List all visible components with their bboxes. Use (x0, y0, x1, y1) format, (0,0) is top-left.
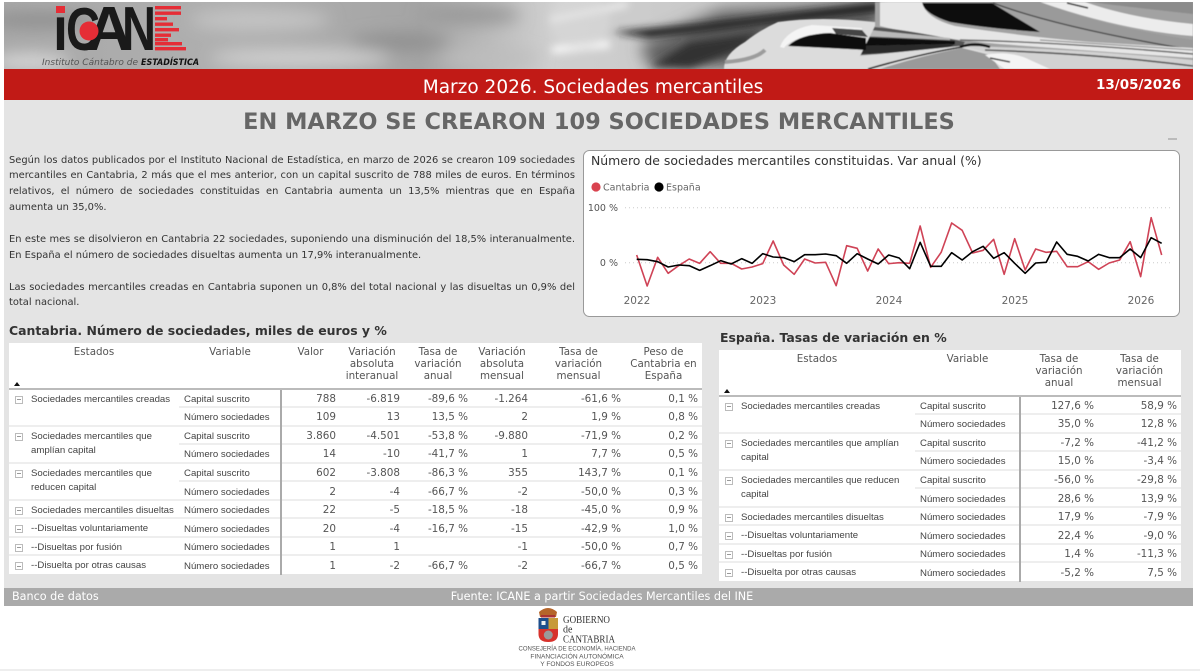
table: España: capital (741, 452, 769, 463)
table: Cantabria: reducen capital (31, 482, 96, 493)
table: Cantabria: Valor (298, 346, 323, 358)
table: Cantabria: Número sociedades (184, 561, 270, 572)
table: Cantabria: -89,6 % (428, 393, 468, 405)
table: Cantabria: mensual (557, 370, 600, 382)
text block: summary: relativos, el número de sociedades constituidas en Cantabria aumenta un 13,5% mientras que en España (9, 186, 575, 197)
table: España: Variable (947, 353, 988, 365)
table: Cantabria: 0,9 % (668, 504, 698, 516)
legend: Cantabria (603, 182, 649, 194)
table: Cantabria: Capital suscrito (184, 431, 250, 442)
table: Cantabria: -1.264 (494, 393, 528, 405)
table: Cantabria: -1 (518, 541, 528, 553)
table: España: 15,0 % (1058, 455, 1094, 467)
table: España: Sociedades mercantiles que reducen (741, 475, 899, 486)
panel: line chart card (583, 150, 1180, 317)
table: España: --Disueltas por fusión (741, 549, 832, 560)
middle dark layers (860, 26, 965, 55)
table: Cantabria: 13 (387, 411, 400, 423)
chart title: Número de sociedades mercantiles constituidas. Var anual (%) (591, 153, 982, 168)
source: Fuente: ICANE a partir Sociedades Mercantiles del INE (451, 590, 753, 603)
table: España: anual (1045, 377, 1073, 389)
table: Cantabria: mensual (480, 370, 524, 382)
table: Cantabria: 20 (323, 523, 336, 535)
table: Cantabria: Número sociedades (184, 486, 270, 498)
front fold (724, 19, 1050, 69)
table: España: -7,2 % (1061, 437, 1094, 449)
table: España: Número sociedades (920, 419, 1006, 430)
table: Cantabria: Número sociedades (184, 505, 270, 516)
table: Cantabria: Número sociedades (184, 449, 270, 460)
table: Cantabria: -2 (518, 486, 528, 498)
table: España: Sociedades mercantiles disueltas (741, 512, 884, 523)
table: España: variación (1035, 365, 1083, 377)
table: Cantabria: --Disueltas voluntariamente (31, 523, 148, 534)
table: Cantabria: 2 (329, 486, 336, 498)
table: España: 13,9 % (1141, 492, 1177, 504)
text block: summary: aumenta un 35,0%. (9, 202, 106, 213)
table: España: capital (741, 489, 769, 500)
table: España: -29,8 % (1137, 474, 1177, 486)
table: España: Capital suscrito (920, 401, 986, 412)
y axis labels: 0 % (600, 258, 618, 269)
table: España: mensual (1118, 377, 1161, 389)
table: Cantabria: 0,5 % (668, 560, 698, 572)
x axis labels: 2026 (1128, 295, 1155, 307)
table: Cantabria: Cantabria en (630, 358, 697, 370)
page background panel (4, 100, 1193, 588)
table: España: Sociedades mercantiles que amplían (741, 438, 899, 449)
logo: ICANE: I (54, 7, 68, 60)
table: Cantabria: -3.808 (366, 467, 400, 479)
table: Cantabria: -2 (518, 560, 528, 572)
table: Cantabria: --Disueltas por fusión (31, 542, 122, 553)
text block: summary: En este mes se disolvieron en Cantabria 22 sociedades, suponiendo una disminución del 18,5% interanualmente. (9, 234, 575, 245)
text block: summary (9, 155, 575, 308)
table: Cantabria: interanual (346, 370, 398, 382)
table: Cantabria: Número sociedades (184, 542, 270, 553)
logo: ICANE (42, 2, 199, 68)
table: Cantabria: 1 (521, 448, 528, 460)
table: España: 7,5 % (1147, 567, 1177, 579)
table: Cantabria: -4.501 (366, 430, 400, 442)
logo: Gobierno de Cantabria: CANTABRIA (563, 634, 616, 646)
x axis labels (624, 295, 1155, 307)
text block: summary: Las sociedades mercantiles creadas en Cantabria suponen un 0,8% del total nacional y las disueltas un 0,9% del (9, 282, 575, 293)
table: España: Tasa de (1120, 353, 1159, 365)
table: Cantabria: 0,2 % (668, 430, 698, 442)
table: Cantabria: 0,1 % (668, 467, 698, 479)
table: España: --Disueltas voluntariamente (741, 530, 858, 541)
table: España: 35,0 % (1058, 418, 1094, 430)
table: Cantabria (9, 343, 702, 574)
x axis labels: 2023 (750, 295, 776, 307)
table: España: Tasa de (1040, 353, 1078, 365)
table: Cantabria: 0,5 % (668, 448, 698, 460)
table: España: variación (1116, 365, 1163, 377)
table: Cantabria: Sociedades mercantiles que (31, 431, 152, 442)
table: Cantabria: 7,7 % (591, 448, 621, 460)
table: Cantabria: -4 (390, 486, 400, 498)
x axis labels: 2025 (1002, 295, 1028, 307)
footer bar (4, 588, 1193, 606)
table: España: Estados (797, 353, 837, 365)
table: Cantabria: 13,5 % (432, 411, 468, 423)
x axis labels: 2024 (876, 295, 903, 307)
legend: España (666, 182, 701, 194)
table: Cantabria: Variable (209, 346, 251, 358)
table: España: Número sociedades (920, 549, 1006, 560)
table: Cantabria: 602 (316, 467, 336, 479)
table: España: Capital suscrito (920, 475, 986, 486)
table: Cantabria: Número sociedades (184, 524, 270, 535)
table: Cantabria: absoluta (480, 358, 524, 370)
band title: Marzo 2026. Sociedades mercantiles (423, 77, 763, 98)
table: Cantabria: 3.860 (306, 430, 336, 442)
table: España: 12,8 % (1141, 418, 1177, 430)
table: Cantabria: -4 (390, 523, 400, 535)
table: España: Número sociedades (920, 494, 1006, 504)
table: Cantabria: absoluta (350, 358, 394, 370)
heading: Cantabria table: Cantabria. Número de sociedades, miles de euros y % (9, 323, 387, 338)
table: Cantabria: -53,8 % (428, 430, 468, 442)
table: Cantabria: 355 (508, 467, 528, 479)
table: Cantabria: -10 (383, 448, 400, 460)
icon: coat of arms (538, 608, 558, 642)
table: Cantabria: -66,7 % (428, 560, 468, 572)
table: España: Número sociedades (920, 531, 1006, 542)
table: Cantabria: Sociedades mercantiles que (31, 468, 152, 479)
table: España: -3,4 % (1144, 455, 1177, 467)
table: Cantabria: Número sociedades (184, 412, 270, 423)
table: Cantabria: -86,3 % (428, 467, 468, 479)
x axis labels: 2022 (624, 295, 650, 307)
table: Cantabria: Peso de (644, 346, 684, 358)
table: Cantabria: anual (424, 370, 452, 382)
table: Cantabria: 109 (316, 411, 336, 423)
table: Cantabria: 788 (316, 393, 336, 405)
table: España (719, 350, 1181, 581)
table: Cantabria: 0,1 % (668, 393, 698, 405)
logo: ICANE: ESTADÍSTICA (141, 56, 199, 68)
table: España: -9,0 % (1144, 530, 1177, 542)
text block: summary: mercantiles en Cantabria, 2 más que el mes anterior, con un capital suscrito de 788 miles de euros. En términos (9, 170, 575, 181)
table: Cantabria: 0,7 % (668, 541, 698, 553)
table: Cantabria: -6.819 (366, 393, 400, 405)
table: España: -11,3 % (1137, 548, 1177, 560)
table: Cantabria: -2 (390, 560, 400, 572)
table: Cantabria: -16,7 % (428, 523, 468, 535)
table: Cantabria: 1,0 % (668, 523, 698, 535)
table: España: 28,6 % (1058, 492, 1094, 504)
table: Cantabria: 2 (521, 411, 528, 423)
logo: Gobierno de Cantabria: de (563, 624, 573, 636)
table: España: -5,2 % (1061, 567, 1094, 579)
table: España: 58,9 % (1141, 400, 1177, 412)
right stack of pages (875, 2, 1193, 69)
table: Cantabria: -45,0 % (581, 504, 621, 516)
table: Cantabria: -41,7 % (428, 448, 468, 460)
date: 13/05/2026 (1096, 77, 1181, 93)
table: Cantabria: -50,0 % (581, 486, 621, 498)
table: Cantabria: -18 (511, 504, 528, 516)
table: Cantabria: Capital suscrito (184, 468, 250, 479)
table: Cantabria: -71,9 % (581, 430, 621, 442)
table: Cantabria: --Disuelta por otras causas (31, 560, 146, 571)
table: Cantabria: amplían capital (31, 445, 96, 456)
table: Cantabria: -9.880 (494, 430, 528, 442)
legend (591, 182, 701, 194)
y axis labels (588, 203, 618, 269)
table: Cantabria: Variación (348, 346, 396, 358)
logo: Gobierno de Cantabria: GOBIERNO (563, 615, 610, 626)
series: Cantabria and España (637, 218, 1162, 286)
logo: Gobierno de Cantabria (518, 608, 636, 668)
table: España: Número sociedades (920, 568, 1006, 579)
table: Cantabria: variación (555, 358, 602, 370)
table: Cantabria: -66,7 % (581, 560, 621, 572)
table: España: Capital suscrito (920, 438, 986, 449)
logo: ICANE: Instituto Cántabro de (42, 57, 138, 67)
table: Cantabria: 0,3 % (668, 486, 698, 498)
table: España: --Disuelta por otras causas (741, 567, 856, 578)
table: Cantabria: 1 (329, 560, 336, 572)
table: España: 1,4 % (1064, 548, 1094, 560)
table: Cantabria: -61,6 % (581, 393, 621, 405)
table: Cantabria: 143,7 % (578, 467, 621, 479)
table: España: Número sociedades (920, 512, 1006, 523)
table: España: 17,9 % (1058, 511, 1094, 523)
table: Cantabria: -50,0 % (581, 541, 621, 553)
table: Cantabria: -5 (390, 504, 400, 516)
table: Cantabria: Tasa de (559, 346, 598, 358)
logo: Gobierno de Cantabria: Y FONDOS EUROPEOS (540, 661, 614, 668)
table: Cantabria: Estados (74, 346, 114, 358)
text block: summary: total nacional. (9, 297, 79, 308)
text block: summary: Según los datos publicados por el Instituto Nacional de Estadística, en marzo de 2026 se crearon 109 sociedades (9, 155, 575, 166)
table: Cantabria: variación (414, 358, 462, 370)
main heading: EN MARZO SE CREARON 109 SOCIEDADES MERCANTILES (243, 109, 955, 135)
table: Cantabria: -42,9 % (581, 523, 621, 535)
table: España: Número sociedades (920, 456, 1006, 467)
table: Cantabria: 1 (393, 541, 400, 553)
table: Cantabria: Tasa de (419, 346, 457, 358)
table: Cantabria: 0,8 % (668, 411, 698, 423)
table: España: -7,9 % (1144, 511, 1177, 523)
table: Cantabria: 1 (329, 541, 336, 553)
table: Cantabria: Sociedades mercantiles creadas (31, 394, 170, 405)
table: Cantabria: Variación (478, 346, 526, 358)
table: España: Sociedades mercantiles creadas (741, 401, 880, 412)
table: España: 22,4 % (1058, 530, 1094, 542)
table: Cantabria: -15 (511, 523, 528, 535)
table: Cantabria: 1,9 % (591, 411, 621, 423)
red title band (4, 69, 1193, 100)
logo: Gobierno de Cantabria: CONSEJERÍA DE ECONOMÍA, HACIENDA (518, 644, 636, 652)
table: Cantabria: 22 (323, 504, 336, 516)
table: España: -41,2 % (1137, 437, 1177, 449)
text block: summary: En España el número de sociedades disueltas aumenta un 17,9% interanualmente. (9, 250, 421, 261)
small dash marker (1168, 138, 1177, 140)
table: Cantabria: Capital suscrito (184, 394, 250, 405)
table: Cantabria: Sociedades mercantiles disueltas (31, 505, 174, 516)
table: España: -56,0 % (1054, 474, 1094, 486)
table: Cantabria: -18,5 % (428, 504, 468, 516)
table: Cantabria: 14 (323, 448, 336, 460)
link: Banco de datos: Banco de datos (12, 590, 99, 603)
table: Cantabria: España (645, 370, 682, 382)
logo: Gobierno de Cantabria: FINANCIACIÓN AUTONÓMICA (530, 652, 624, 660)
header banner: newspaper photograph (4, 2, 1193, 69)
table: Cantabria: -66,7 % (428, 486, 468, 498)
y axis labels: 100 % (588, 203, 618, 214)
table: España: 127,6 % (1051, 400, 1094, 412)
bottom edge strip (0, 669, 1200, 671)
heading: España table: España. Tasas de variación en % (720, 330, 947, 345)
